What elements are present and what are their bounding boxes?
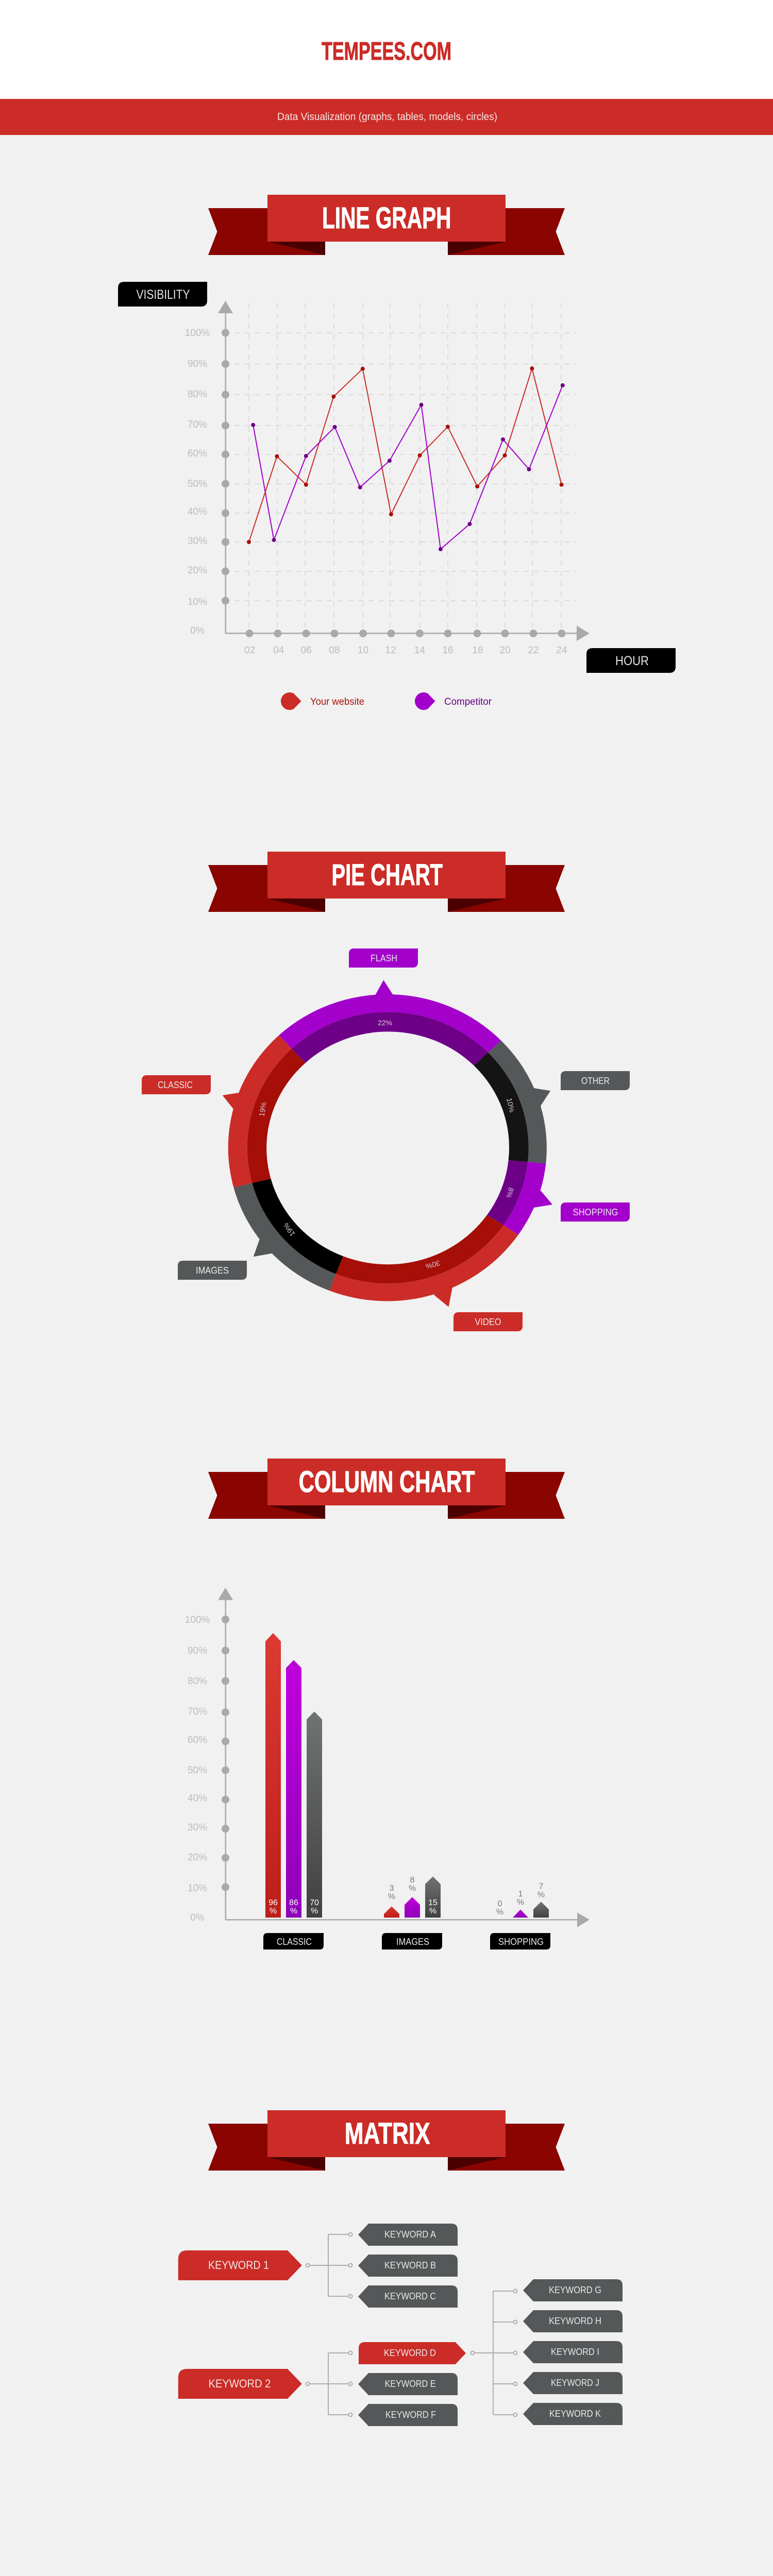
x axis labels: 16 (442, 645, 453, 656)
column y labels: 10% (188, 1883, 207, 1894)
legend: Competitor (444, 697, 492, 707)
heading: line graph ribbon: LINE GRAPH (322, 201, 451, 235)
group: shopping bars (496, 1883, 549, 1918)
group: shopping bars: % (537, 1891, 545, 1900)
column y labels: 70% (188, 1706, 207, 1717)
node: keyword 2: KEYWORD 2 (208, 2377, 271, 2390)
pie label: other: OTHER (581, 1076, 610, 1086)
pie label: flash: FLASH (371, 953, 397, 963)
group: images bars: % (429, 1907, 436, 1916)
node: keyword K: KEYWORD K (549, 2409, 601, 2419)
column y axis (218, 1588, 233, 1920)
x axis labels: 18 (472, 645, 483, 656)
node: keyword A (358, 2224, 458, 2246)
node: keyword E: KEYWORD E (384, 2379, 436, 2389)
node: keyword C (358, 2285, 458, 2308)
y axis labels: 40% (188, 506, 207, 517)
group: classic bars (265, 1633, 322, 1918)
node: keyword G (523, 2279, 623, 2301)
title: TEMPEES.COM (322, 38, 451, 65)
segment: video: 30% (425, 1259, 441, 1270)
node: keyword 1 (178, 2250, 302, 2280)
connectors (306, 2233, 517, 2416)
category tag: images (382, 1933, 442, 1950)
category tag: shopping: SHOPPING (498, 1937, 544, 1947)
node: keyword I (523, 2341, 623, 2363)
group: images bars: 3 (390, 1884, 394, 1893)
x axis labels: 08 (329, 645, 340, 656)
group: images bars: 8 (410, 1876, 415, 1885)
x axis (225, 625, 590, 641)
node: keyword 1: KEYWORD 1 (208, 2259, 269, 2272)
node: keyword J: KEYWORD J (551, 2378, 599, 2388)
heading: matrix ribbon: MATRIX (345, 2117, 430, 2150)
group: shopping bars: % (517, 1898, 524, 1907)
category tag: classic (263, 1933, 324, 1950)
legend: Your website (310, 697, 364, 707)
series: competitor (251, 383, 565, 551)
column y labels: 80% (188, 1676, 207, 1687)
pie label: flash (349, 948, 418, 968)
segment: images: 19% (281, 1222, 297, 1238)
category tag: images: IMAGES (396, 1937, 429, 1947)
axis tag: visibility (118, 282, 207, 307)
pie label: video (453, 1312, 523, 1331)
group: classic bars: 70 (310, 1899, 319, 1907)
x axis labels: 22 (528, 645, 539, 656)
column y labels: 40% (188, 1793, 207, 1804)
node: keyword B (358, 2255, 458, 2277)
pie chart ring (223, 980, 552, 1307)
matrix diagram (178, 2224, 623, 2426)
column y labels: 50% (188, 1765, 207, 1776)
x axis labels: 10 (358, 645, 368, 656)
segment: images (233, 1179, 343, 1291)
y axis labels: 80% (188, 389, 207, 400)
node: keyword 2 (178, 2369, 302, 2399)
column chart (185, 1588, 590, 1950)
node: keyword F (358, 2404, 458, 2426)
pie label: video: VIDEO (475, 1317, 501, 1327)
group: shopping bars: 1 (518, 1890, 523, 1899)
subtitle bar: Data Visualization (graphs, tables, models, circles) (277, 111, 497, 123)
node: keyword C: KEYWORD C (384, 2291, 436, 2301)
segment: shopping: 8% (505, 1187, 515, 1199)
node: keyword H (523, 2310, 623, 2332)
axis tag: hour (586, 648, 676, 673)
pie label: classic (142, 1075, 211, 1094)
group: shopping bars: 7 (539, 1883, 544, 1891)
y axis labels: 60% (188, 448, 207, 459)
segment: video (329, 1215, 518, 1301)
column y labels: 100% (185, 1615, 210, 1625)
legend (281, 692, 492, 710)
header band (0, 0, 773, 135)
pie label: other (561, 1071, 630, 1090)
node: keyword D: KEYWORD D (384, 2348, 436, 2358)
pie label: shopping: SHOPPING (573, 1207, 618, 1217)
x axis labels: 04 (273, 645, 284, 656)
heading: matrix ribbon (208, 2110, 565, 2171)
node: keyword A: KEYWORD A (384, 2229, 436, 2240)
node: keyword D (359, 2342, 466, 2364)
group: images bars: % (409, 1884, 416, 1893)
subtitle bar (0, 99, 773, 135)
group: shopping bars: % (496, 1908, 503, 1917)
y axis labels: 50% (188, 479, 207, 489)
group: images bars: % (388, 1892, 395, 1901)
column y labels: 0% (190, 1912, 205, 1923)
column y labels: 90% (188, 1646, 207, 1656)
heading: line graph ribbon (208, 195, 565, 255)
x axis labels: 12 (385, 645, 396, 656)
y axis labels: 10% (188, 597, 207, 607)
x axis labels (244, 645, 567, 656)
pie label: shopping (561, 1202, 630, 1222)
category tag: classic: CLASSIC (277, 1937, 312, 1947)
line graph chart (118, 282, 676, 710)
x axis labels: 24 (556, 645, 567, 656)
group: images bars: 15 (428, 1899, 438, 1907)
category tag: shopping (490, 1933, 550, 1950)
group: images bars (384, 1876, 441, 1918)
axis tag: visibility: VISIBILITY (136, 287, 190, 302)
column y labels (185, 1615, 210, 1923)
group: classic bars: 86 (289, 1899, 298, 1907)
segment: other: 10% (505, 1097, 516, 1113)
column y labels: 60% (188, 1735, 207, 1745)
node: keyword B: KEYWORD B (384, 2260, 436, 2270)
node: keyword J (523, 2372, 623, 2394)
y axis labels: 100% (185, 328, 210, 338)
heading: column chart ribbon: COLUMN CHART (299, 1465, 475, 1499)
column y labels: 20% (188, 1852, 207, 1863)
y axis labels: 30% (188, 536, 207, 547)
y axis labels: 0% (190, 625, 205, 636)
series: your website (247, 366, 564, 544)
column x axis (225, 1912, 590, 1927)
column y labels: 30% (188, 1822, 207, 1833)
y axis (218, 301, 233, 634)
pie label: images (178, 1261, 247, 1280)
group: classic bars: % (290, 1907, 297, 1916)
node: keyword K (523, 2403, 623, 2425)
group: classic bars: % (311, 1907, 318, 1916)
group: classic bars: 96 (268, 1899, 278, 1907)
segment: classic: 19% (258, 1101, 268, 1117)
node: keyword F: KEYWORD F (385, 2410, 436, 2420)
segment: flash: 22% (378, 1019, 392, 1027)
heading: column chart ribbon (208, 1459, 565, 1519)
segment: classic (228, 1035, 305, 1188)
y axis labels: 20% (188, 565, 207, 576)
group: shopping bars: 0 (498, 1900, 502, 1908)
node: keyword G: KEYWORD G (549, 2285, 601, 2295)
heading: pie chart ribbon: PIE CHART (332, 858, 443, 892)
x axis labels: 06 (300, 645, 312, 656)
pie label: images: IMAGES (196, 1265, 229, 1276)
y axis labels: 90% (188, 359, 207, 369)
node: keyword E (358, 2373, 458, 2395)
x axis labels: 20 (499, 645, 511, 656)
y axis labels: 70% (188, 419, 207, 430)
segment: shopping (487, 1160, 546, 1235)
axis tag: hour: HOUR (615, 654, 649, 668)
y axis labels (185, 328, 210, 636)
segment: other (474, 1041, 547, 1163)
pointers (223, 980, 552, 1307)
node: keyword H: KEYWORD H (549, 2316, 601, 2326)
x axis labels: 14 (414, 645, 425, 656)
x axis labels: 02 (244, 645, 255, 656)
pie label: classic: CLASSIC (158, 1080, 193, 1090)
group: classic bars: % (270, 1907, 277, 1916)
heading: pie chart ribbon (208, 852, 565, 912)
node: keyword I: KEYWORD I (551, 2347, 599, 2357)
segment: flash (279, 994, 501, 1065)
